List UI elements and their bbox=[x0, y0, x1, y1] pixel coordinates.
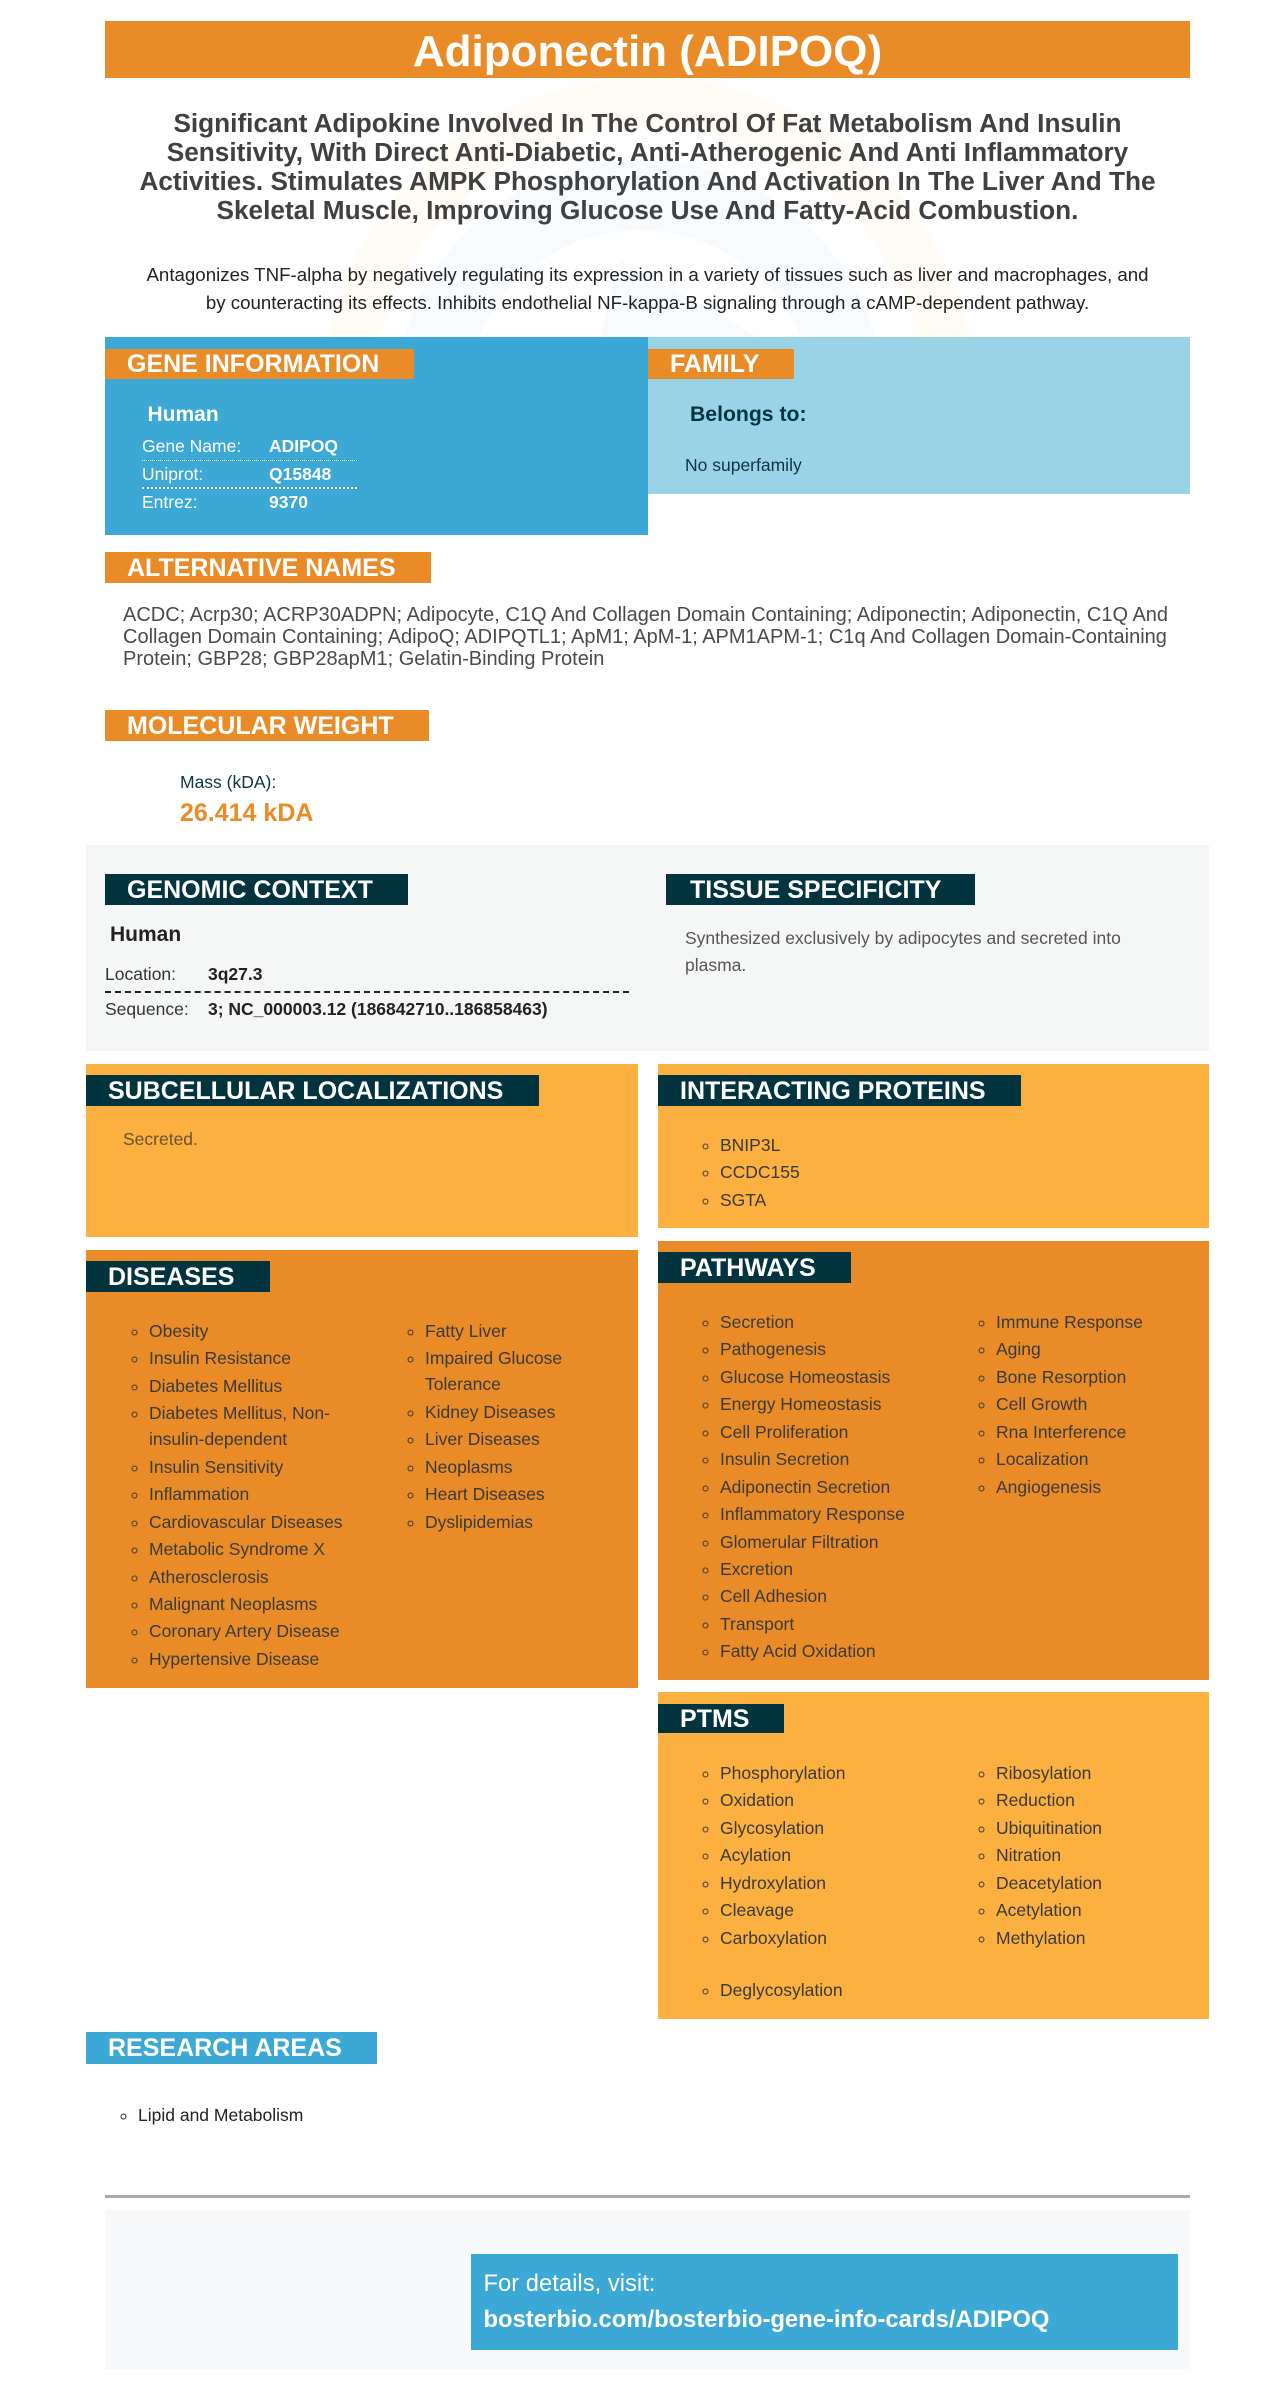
pathways list column 1: Insulin Secretion bbox=[720, 1449, 849, 1469]
PTMs list column 1: Phosphorylation bbox=[720, 1763, 846, 1783]
diseases list column 2: Impaired Glucose bbox=[425, 1348, 562, 1368]
headline summary: Significant Adipokine Involved In The Control Of Fat Metabolism And Insulin bbox=[173, 108, 1122, 138]
headline summary: Skeletal Muscle, Improving Glucose Use And Fatty-Acid Combustion. bbox=[217, 194, 1078, 224]
diseases list column 1: Atherosclerosis bbox=[149, 1566, 269, 1586]
pathways list column 2: Bone Resorption bbox=[996, 1367, 1126, 1387]
gene details table: Uniprot: bbox=[142, 464, 203, 484]
diseases list column 1: Insulin Sensitivity bbox=[149, 1457, 283, 1477]
callout: details link bbox=[471, 2254, 1178, 2350]
diseases list column 1: Malignant Neoplasms bbox=[149, 1594, 317, 1614]
panel: PTMs bbox=[658, 1692, 1209, 2019]
gene details table: 9370 bbox=[269, 492, 308, 512]
heading: molecular weight: MOLECULAR WEIGHT bbox=[127, 712, 394, 740]
diseases list column 1: Diabetes Mellitus, Non- bbox=[149, 1403, 330, 1423]
headline summary: Sensitivity, With Direct Anti-Diabetic, Anti-Atherogenic And Anti Inflammatory bbox=[167, 136, 1128, 166]
PTMs list column 2: Acetylation bbox=[996, 1900, 1082, 1920]
tissue specificity text: plasma. bbox=[685, 954, 746, 974]
diseases list column 2: Heart Diseases bbox=[425, 1484, 545, 1504]
diseases list column 2 bbox=[408, 1321, 562, 1532]
genomic location table: Sequence: bbox=[105, 999, 189, 1019]
PTMs list column 2: Ubiquitination bbox=[996, 1818, 1102, 1838]
diseases list column 1: Diabetes Mellitus bbox=[149, 1376, 282, 1396]
PTMs list column 1: Oxidation bbox=[720, 1790, 794, 1810]
title bbox=[105, 21, 1190, 78]
research areas list: Lipid and Metabolism bbox=[138, 2105, 303, 2125]
panel: genomic context and tissue specificity bbox=[86, 845, 1209, 1051]
description paragraph bbox=[146, 264, 1149, 313]
heading: genomic context: GENOMIC CONTEXT bbox=[127, 876, 373, 904]
protein list bbox=[702, 1135, 800, 1210]
panel: footer bbox=[105, 2210, 1190, 2369]
callout: details link: bosterbio.com/bosterbio-gene-info-cards/ADIPOQ bbox=[484, 2306, 1049, 2333]
panel: interacting proteins bbox=[658, 1064, 1209, 1228]
PTMs list column 1: Cleavage bbox=[720, 1900, 794, 1920]
heading: interacting proteins: INTERACTING PROTEINS bbox=[680, 1077, 986, 1105]
PTMs list column 2: Deacetylation bbox=[996, 1873, 1102, 1893]
heading: diseases bbox=[86, 1261, 270, 1292]
tissue specificity text: Synthesized exclusively by adipocytes and secreted into bbox=[685, 928, 1121, 948]
pathways list column 1: Transport bbox=[720, 1614, 794, 1634]
belongs to label: Belongs to: bbox=[690, 403, 807, 426]
pathways list column 2: Immune Response bbox=[996, 1312, 1143, 1332]
heading: research areas: RESEARCH AREAS bbox=[108, 2034, 342, 2062]
heading: family bbox=[648, 349, 794, 379]
heading: PTMs bbox=[658, 1704, 784, 1733]
pathways list column 2 bbox=[978, 1312, 1143, 1497]
pathways list column 1: Inflammatory Response bbox=[720, 1504, 905, 1524]
pathways list column 1: Pathogenesis bbox=[720, 1339, 826, 1359]
pathways list column 2: Rna Interference bbox=[996, 1422, 1126, 1442]
PTMs list column 2: Nitration bbox=[996, 1845, 1061, 1865]
pathways list column 1: Fatty Acid Oxidation bbox=[720, 1641, 876, 1661]
pathways list column 2: Aging bbox=[996, 1339, 1041, 1359]
diseases list column 2: Dyslipidemias bbox=[425, 1512, 533, 1532]
PTMs list column 1: Deglycosylation bbox=[720, 1980, 843, 2000]
panel: pathways bbox=[658, 1241, 1209, 1680]
diseases list column 2: Kidney Diseases bbox=[425, 1402, 555, 1422]
diseases list column 1 bbox=[132, 1321, 343, 1669]
species label: Human bbox=[110, 923, 181, 946]
protein list: SGTA bbox=[720, 1190, 766, 1210]
heading: family: FAMILY bbox=[670, 350, 759, 378]
diseases list column 1: Insulin Resistance bbox=[149, 1348, 291, 1368]
pathways list column 1: Cell Proliferation bbox=[720, 1422, 848, 1442]
species label: Human bbox=[148, 403, 219, 426]
pathways list column 2: Cell Growth bbox=[996, 1394, 1087, 1414]
panel: diseases bbox=[86, 1250, 638, 1688]
PTMs list column 2: Reduction bbox=[996, 1790, 1075, 1810]
watermark logo bbox=[328, 78, 970, 337]
diseases list column 1: Inflammation bbox=[149, 1484, 249, 1504]
PTMs list column 2: Ribosylation bbox=[996, 1763, 1091, 1783]
alternative names text: Collagen Domain Containing; AdipoQ; ADIPQTL1; ApM1; ApM-1; APM1APM-1; C1q And Collagen Domain-Containing bbox=[123, 626, 1167, 648]
gene details table: Entrez: bbox=[142, 492, 197, 512]
diseases list column 2: Neoplasms bbox=[425, 1457, 513, 1477]
diseases list column 2: Tolerance bbox=[425, 1374, 501, 1394]
PTMs list column 1: Hydroxylation bbox=[720, 1873, 826, 1893]
pathways list column 2: Angiogenesis bbox=[996, 1477, 1101, 1497]
gene details table: ADIPOQ bbox=[269, 436, 338, 456]
heading: diseases: DISEASES bbox=[108, 1263, 234, 1291]
heading: pathways bbox=[658, 1252, 851, 1283]
pathways list column 1: Glomerular Filtration bbox=[720, 1532, 879, 1552]
heading: alternative names: ALTERNATIVE NAMES bbox=[127, 554, 396, 582]
genomic location table bbox=[105, 964, 629, 1019]
PTMs list column 2 bbox=[978, 1763, 1102, 1948]
gene details table: Gene Name: bbox=[142, 436, 241, 456]
pathways list column 1: Secretion bbox=[720, 1312, 794, 1332]
diseases list column 1: Metabolic Syndrome X bbox=[149, 1539, 325, 1559]
protein list: CCDC155 bbox=[720, 1162, 800, 1182]
genomic location table: 3; NC_000003.12 (186842710..186858463) bbox=[208, 999, 548, 1019]
protein list: BNIP3L bbox=[720, 1135, 780, 1155]
gene details table: Q15848 bbox=[269, 464, 331, 484]
pathways list column 2: Localization bbox=[996, 1449, 1088, 1469]
panel: gene information bbox=[105, 337, 648, 535]
alternative names text bbox=[123, 604, 1168, 670]
PTMs list column 1: Acylation bbox=[720, 1845, 791, 1865]
PTMs list column 1: Glycosylation bbox=[720, 1818, 824, 1838]
heading: gene information: GENE INFORMATION bbox=[127, 350, 379, 378]
pathways list column 1: Cell Adhesion bbox=[720, 1586, 827, 1606]
PTMs list column 1: Carboxylation bbox=[720, 1928, 827, 1948]
diseases list column 1: Cardiovascular Diseases bbox=[149, 1512, 343, 1532]
panel: family bbox=[648, 337, 1190, 494]
pathways list column 1: Excretion bbox=[720, 1559, 793, 1579]
pathways list column 1: Glucose Homeostasis bbox=[720, 1367, 890, 1387]
pathways list column 1: Adiponectin Secretion bbox=[720, 1477, 890, 1497]
description paragraph: by counteracting its effects. Inhibits endothelial NF-kappa-B signaling through a cAMP-dependent pathway. bbox=[206, 292, 1089, 313]
headline summary bbox=[139, 108, 1156, 224]
pathways list column 1: Energy Homeostasis bbox=[720, 1394, 881, 1414]
diseases list column 1: Obesity bbox=[149, 1321, 208, 1341]
title: Adiponectin (ADIPOQ) bbox=[413, 27, 882, 76]
pathways list column 1 bbox=[702, 1312, 905, 1661]
diseases list column 2: Liver Diseases bbox=[425, 1429, 540, 1449]
genomic location table: Location: bbox=[105, 964, 176, 984]
PTMs list column 2: Methylation bbox=[996, 1928, 1086, 1948]
diseases list column 1: Hypertensive Disease bbox=[149, 1649, 319, 1669]
PTMs list column 1 bbox=[702, 1763, 846, 2000]
molecular weight value: 26.414 kDA bbox=[180, 799, 313, 827]
genomic location table: 3q27.3 bbox=[208, 964, 262, 984]
alternative names text: Protein; GBP28; GBP28apM1; Gelatin-Binding Protein bbox=[123, 648, 604, 670]
diseases list column 2: Fatty Liver bbox=[425, 1321, 507, 1341]
diseases list column 1: insulin-dependent bbox=[149, 1429, 287, 1449]
panel: subcellular localizations bbox=[86, 1064, 638, 1237]
heading: PTMs: PTMS bbox=[680, 1705, 749, 1733]
heading: tissue specificity: TISSUE SPECIFICITY bbox=[690, 876, 941, 904]
description paragraph: Antagonizes TNF-alpha by negatively regulating its expression in a variety of tissues such as liver and macrophages, and bbox=[146, 264, 1149, 284]
localization text: Secreted. bbox=[123, 1129, 198, 1149]
footer rule bbox=[105, 2195, 1190, 2198]
diseases list column 1: Coronary Artery Disease bbox=[149, 1621, 340, 1641]
tissue specificity text bbox=[685, 928, 1121, 974]
heading: pathways: PATHWAYS bbox=[680, 1254, 816, 1282]
callout: details link: For details, visit: bbox=[484, 2270, 655, 2297]
gene details table bbox=[142, 436, 357, 512]
headline summary: Activities. Stimulates AMPK Phosphorylation And Activation In The Liver And The bbox=[139, 166, 1156, 196]
molecular weight value bbox=[180, 772, 313, 827]
family value: No superfamily bbox=[685, 455, 802, 475]
alternative names text: ACDC; Acrp30; ACRP30ADPN; Adipocyte, C1Q And Collagen Domain Containing; Adiponectin; Adiponectin, C1Q And bbox=[123, 604, 1168, 626]
molecular weight value: Mass (kDA): bbox=[180, 772, 276, 792]
heading: subcellular localizations: SUBCELLULAR LOCALIZATIONS bbox=[108, 1077, 503, 1105]
